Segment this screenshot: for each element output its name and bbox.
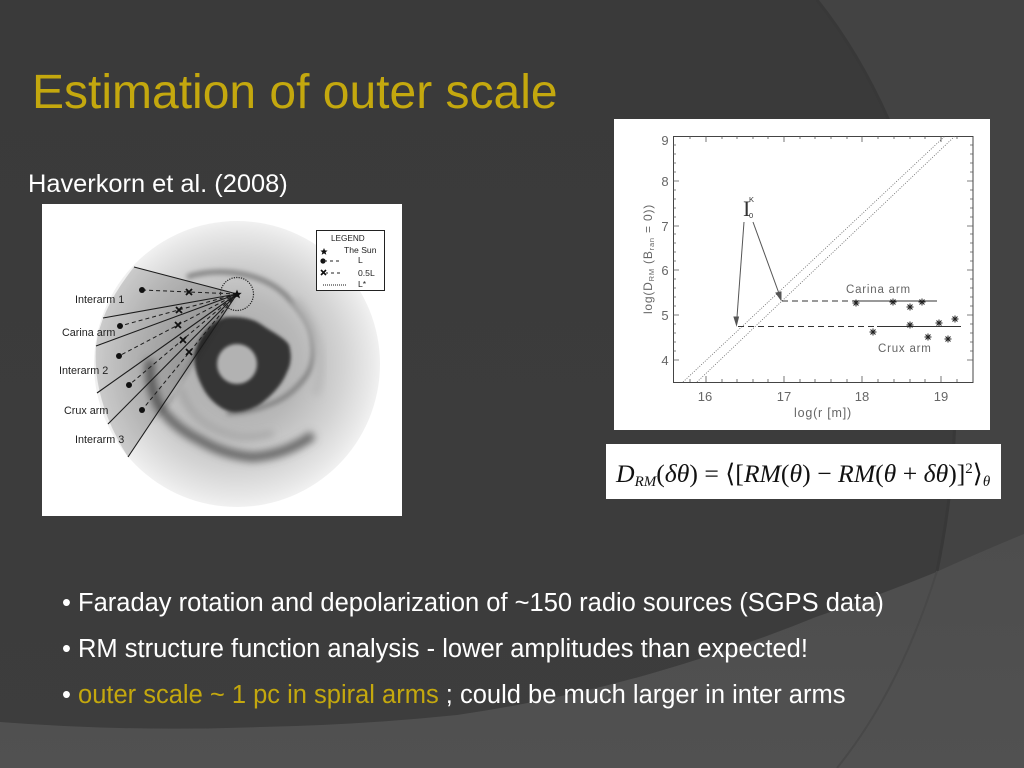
- region labels: Interarm 3: [75, 434, 124, 446]
- region labels: Carina arm: [62, 327, 115, 339]
- formula: RM: [634, 474, 658, 490]
- region labels: Interarm 1: [75, 294, 124, 306]
- formula: ⟩: [973, 459, 983, 488]
- Carina label: Carina arm: [846, 284, 911, 296]
- x axis numbers: 18: [855, 389, 869, 404]
- outer scale symbol: 0: [749, 211, 753, 220]
- sector lines: [96, 267, 237, 457]
- formula: δθ) = ⟨[RM(θ) − RM(θ + δθ)]: [665, 459, 965, 488]
- data points: [852, 298, 958, 342]
- sightline wedge: [96, 267, 237, 457]
- dotted diagonals: [683, 136, 955, 382]
- y axis numbers: [661, 133, 669, 368]
- formula: θ: [983, 474, 991, 490]
- citation: Haverkorn et al. (2008): [28, 170, 288, 198]
- Carina fit line: [782, 300, 937, 302]
- y axis label: log(D: [641, 281, 655, 314]
- outer scale symbol: [743, 195, 754, 221]
- legend: LEGEND: [331, 234, 365, 243]
- plot frame: [674, 136, 973, 382]
- y axis numbers: 5: [661, 308, 669, 323]
- y axis numbers: 4: [661, 353, 669, 368]
- bullet 2: • RM structure function analysis - lower amplitudes than expected!: [62, 635, 808, 663]
- bullet 3: • outer scale ~ 1 pc in spiral arms ; could be much larger in inter arms: [62, 681, 845, 709]
- legend: 0.5L: [358, 268, 375, 278]
- x axis numbers: 17: [777, 389, 791, 404]
- legend: [316, 230, 384, 290]
- outer scale symbol: I: [743, 196, 750, 221]
- y axis label: (B: [641, 250, 655, 268]
- formula: (: [656, 459, 665, 488]
- bullet 1: • Faraday rotation and depolarization of ~150 radio sources (SGPS data): [62, 589, 884, 617]
- y axis label: RM: [647, 268, 656, 281]
- region labels: [59, 294, 124, 446]
- Crux fit line: [738, 326, 961, 328]
- y axis numbers: 7: [661, 219, 669, 234]
- x axis numbers: 19: [934, 389, 948, 404]
- x axis numbers: 16: [698, 389, 712, 404]
- sun star: [232, 290, 242, 298]
- L star circle: [220, 278, 254, 310]
- region labels: Crux arm: [64, 405, 108, 417]
- y axis numbers: 9: [661, 133, 669, 148]
- y axis label: ran: [647, 237, 656, 250]
- panel: structure function chart: [614, 119, 990, 430]
- formula: D: [615, 459, 635, 488]
- arrow to Crux: [734, 222, 744, 325]
- axis ticks: [673, 136, 973, 382]
- legend: L*: [358, 279, 367, 289]
- legend: L: [358, 255, 363, 265]
- x axis numbers: [698, 389, 948, 404]
- y axis label: = 0)): [641, 204, 655, 237]
- x axis label: log(r [m]): [794, 406, 852, 420]
- L markers: [116, 287, 145, 413]
- title: Estimation of outer scale: [32, 66, 558, 119]
- region labels: Interarm 2: [59, 365, 108, 377]
- dashed sightlines: [119, 290, 237, 410]
- y axis numbers: 8: [661, 174, 669, 189]
- Crux label: Crux arm: [878, 343, 932, 355]
- galaxy disc: [94, 221, 380, 507]
- arrow to Carina: [753, 222, 781, 300]
- bullet list: [62, 589, 884, 709]
- legend: The Sun: [344, 245, 377, 255]
- y axis numbers: 6: [661, 263, 669, 278]
- formula: [606, 444, 1001, 499]
- panel: galaxy map: [42, 204, 402, 516]
- formula: 2: [965, 461, 973, 477]
- 0.5L markers: [175, 289, 192, 355]
- outer scale symbol: K: [749, 195, 754, 204]
